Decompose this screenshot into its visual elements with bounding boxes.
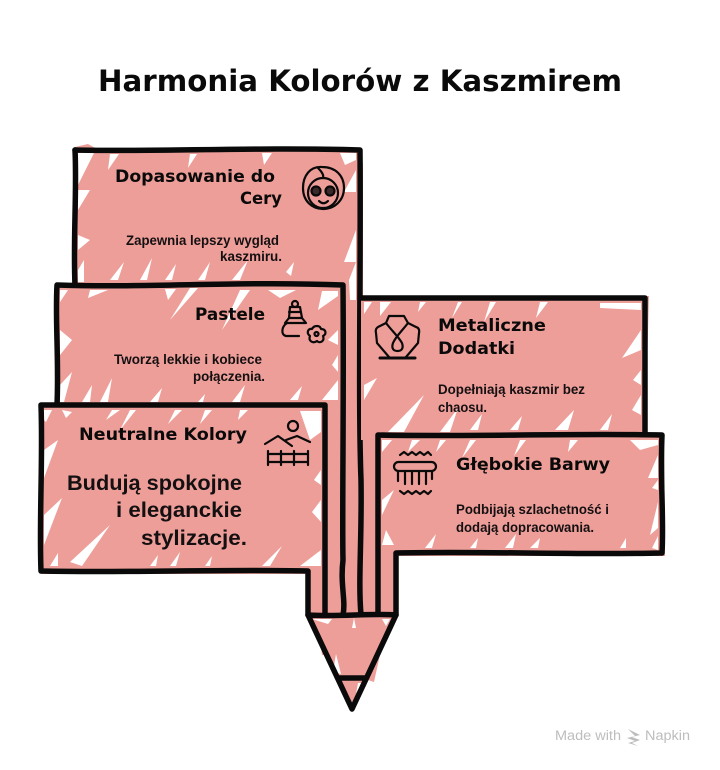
text: Neutralne Kolory description: stylizacje. xyxy=(141,526,247,550)
heading: Metaliczne Dodatki: Metaliczne xyxy=(438,316,546,336)
heading: Glebokie Barwy: Głębokie Barwy xyxy=(456,455,610,475)
icon: landscape with fence xyxy=(265,421,310,465)
pencil tip xyxy=(290,614,420,709)
panel: Metaliczne Dodatki xyxy=(361,296,649,440)
title: Harmonia Kolorów z Kaszmirem xyxy=(98,64,622,98)
text: Metaliczne Dodatki description xyxy=(438,382,585,415)
text: Neutralne Kolory description: i eleganckie xyxy=(116,498,242,522)
panel: Neutralne Kolory xyxy=(40,405,325,615)
text: Metaliczne Dodatki description: chaosu. xyxy=(438,400,487,415)
icon: bottle and flower xyxy=(282,301,325,342)
text: Metaliczne Dodatki description: Dopełniają kaszmir bez xyxy=(438,382,585,397)
text: Pastele description xyxy=(114,352,265,384)
panel: Dopasowanie do Cery xyxy=(72,144,720,615)
text: Pastele description: Tworzą lekkie i kobiece xyxy=(114,352,262,367)
text: Neutralne Kolory description: Budują spokojne xyxy=(67,471,242,495)
panel: Pastele xyxy=(56,284,344,615)
text: Glebokie Barwy description xyxy=(456,502,609,535)
text: Dopasowanie do Cery description xyxy=(126,233,282,264)
heading: Metaliczne Dodatki: Dodatki xyxy=(438,339,515,359)
text: Glebokie Barwy description: dodają dopracowania. xyxy=(456,520,594,535)
text: Glebokie Barwy description: Podbijają szlachetność i xyxy=(456,502,609,517)
icon: face mask xyxy=(303,167,344,209)
icon: necklace on stand xyxy=(376,316,419,358)
heading: Dopasowanie do Cery: Dopasowanie do xyxy=(115,167,275,187)
watermark: Made with Napkin xyxy=(555,728,690,746)
heading: Neutralne Kolory: Neutralne Kolory xyxy=(79,425,247,445)
panel: Glebokie Barwy xyxy=(378,433,665,615)
icon: cashmere brush xyxy=(394,452,436,494)
heading: Dopasowanie do Cery xyxy=(115,167,282,209)
heading: Dopasowanie do Cery: Cery xyxy=(240,189,282,209)
text: Dopasowanie do Cery description: kaszmiru. xyxy=(220,249,282,264)
heading: Pastele: Pastele xyxy=(195,305,265,325)
text: Dopasowanie do Cery description: Zapewnia lepszy wygląd xyxy=(126,233,279,248)
watermark: Made with Napkin: Napkin xyxy=(645,728,690,743)
text: Neutralne Kolory description xyxy=(67,471,247,550)
watermark: Made with Napkin: Made with xyxy=(555,728,621,743)
text: Pastele description: połączenia. xyxy=(193,369,265,384)
heading: Metaliczne Dodatki xyxy=(438,316,546,359)
